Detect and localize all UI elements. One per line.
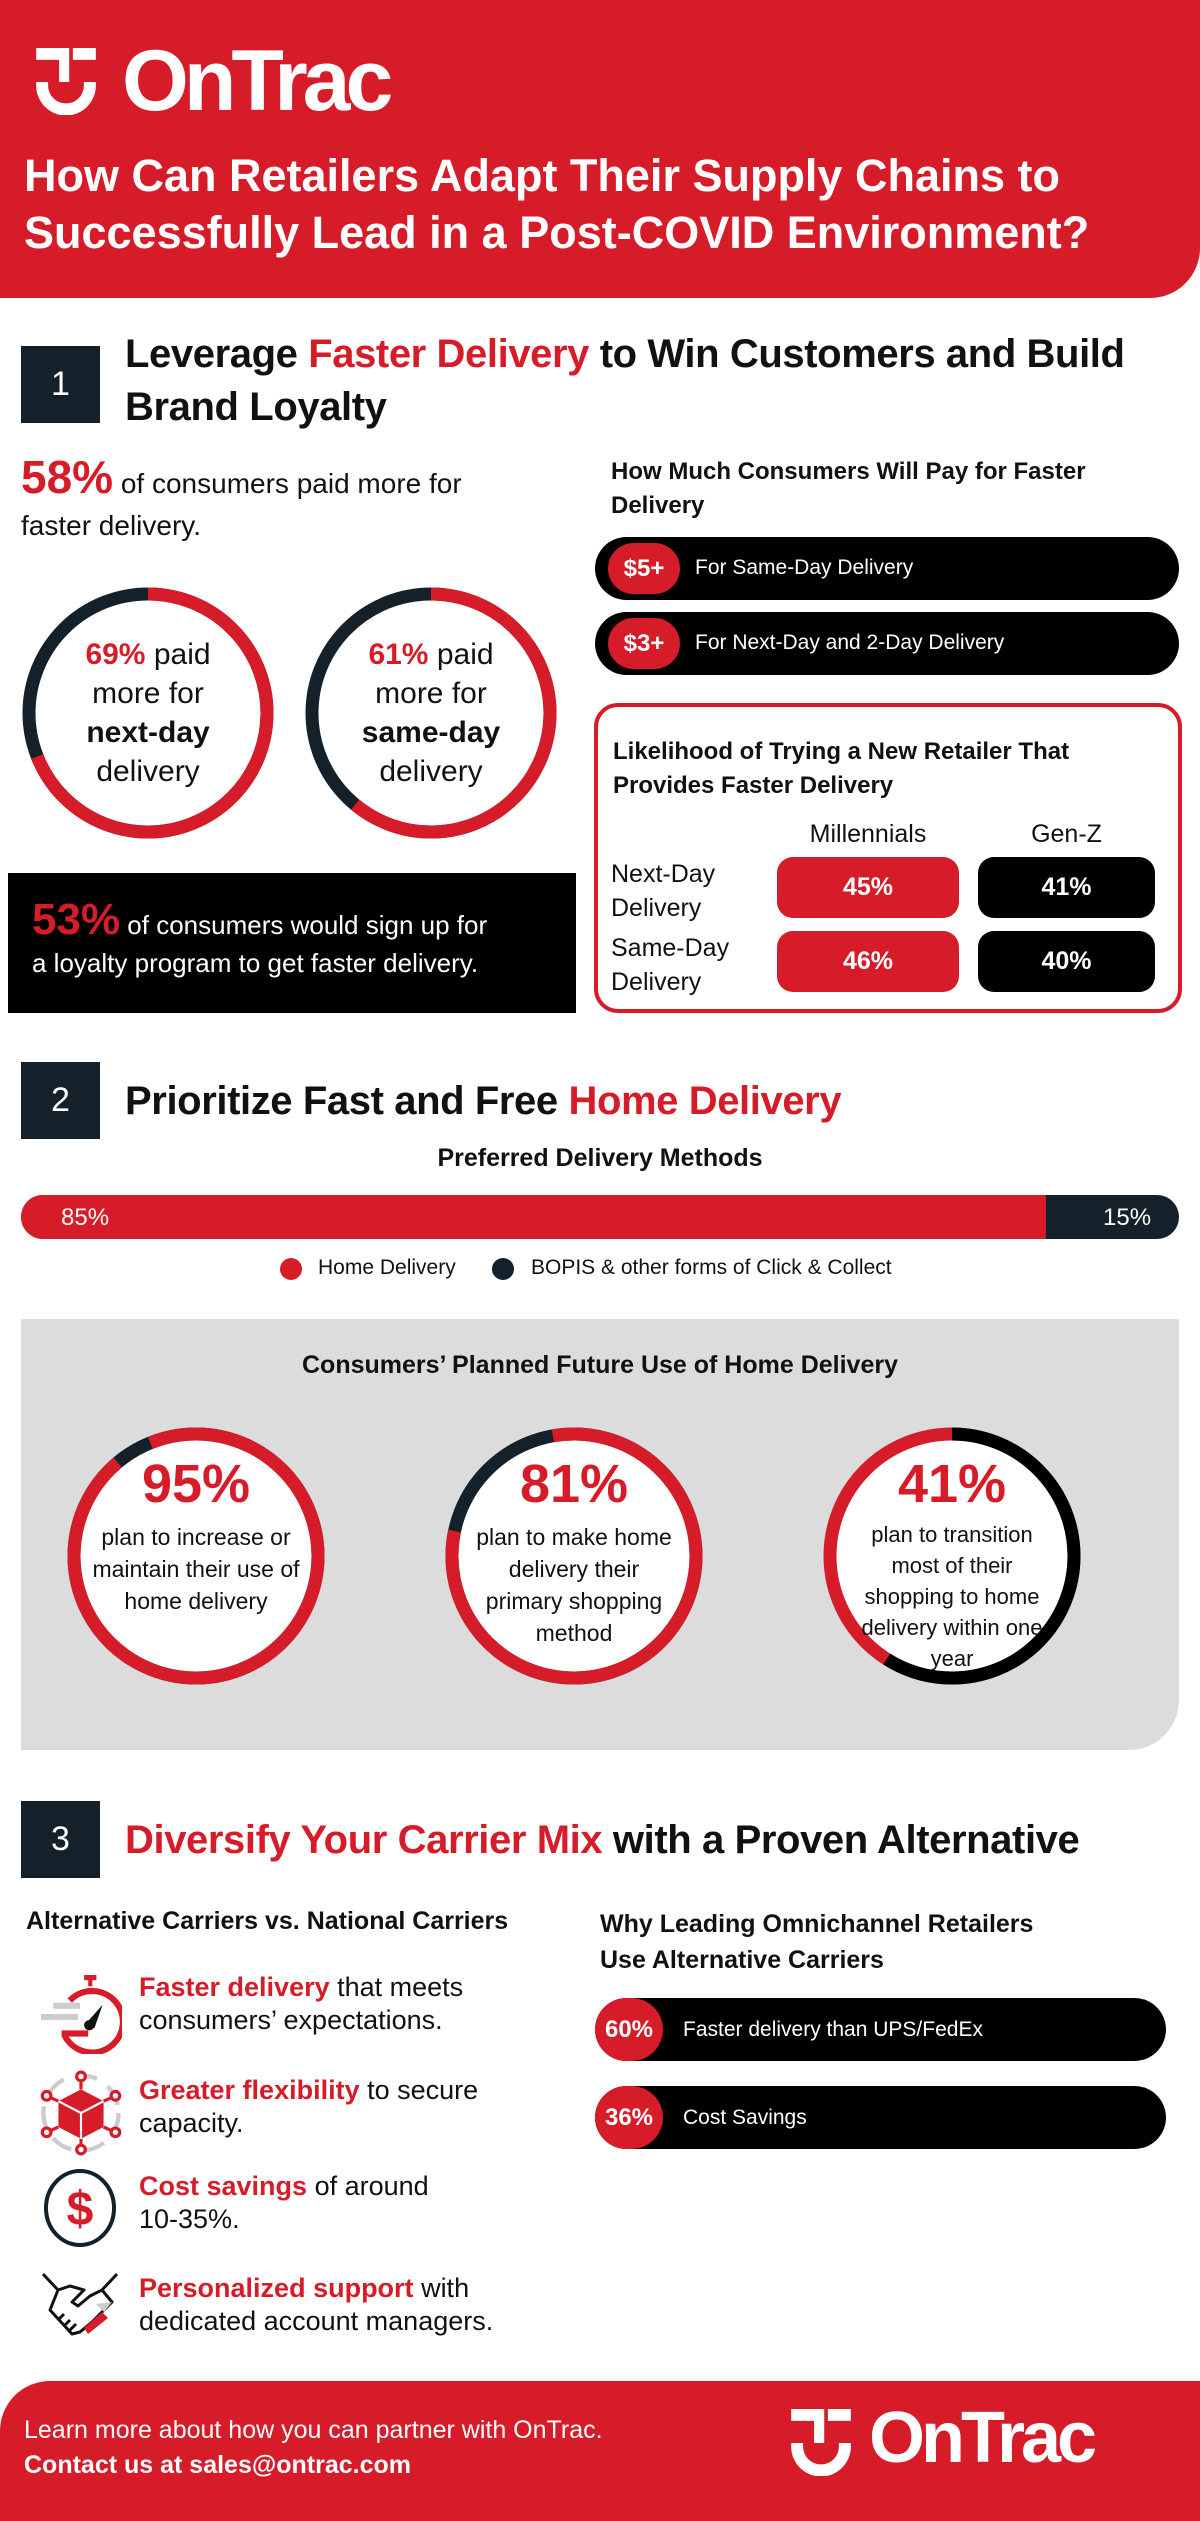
pill $3+ [595, 612, 1179, 675]
preferred delivery bar [21, 1144, 1179, 1280]
ring 41%: plan to transition most of their shopping to home delivery within one year [862, 1522, 1042, 1671]
ring 61%: 61% paid [368, 638, 494, 671]
preferred delivery bar: 85% [61, 1204, 109, 1231]
pay heading: Delivery [611, 492, 704, 519]
item: faster delivery [139, 1972, 463, 2035]
ring 81%: 81% [520, 1454, 628, 1514]
title: How Can Retailers Adapt Their Supply Chains to [24, 150, 1060, 201]
pay heading: How Much Consumers Will Pay for Faster [611, 458, 1086, 485]
stat 58% [21, 451, 462, 541]
item: cost savings: 10-35%. [139, 2204, 240, 2234]
gray panel future use: Consumers’ Planned Future Use of Home Delivery [302, 1351, 898, 1379]
pill 60%: Faster delivery than UPS/FedEx [683, 2018, 983, 2041]
ring 41% [824, 1428, 1080, 1684]
ring 69%: delivery [96, 755, 200, 788]
footer text: Contact us at sales@ontrac.com [24, 2451, 411, 2479]
item: personalized support: Personalized support with [139, 2273, 469, 2303]
likelihood box: 40% [1041, 947, 1092, 975]
likelihood box: Delivery [611, 968, 701, 996]
icon: handshake [42, 2273, 118, 2336]
item: cost savings [139, 2171, 429, 2234]
pill 36%: Cost Savings [683, 2106, 807, 2129]
header banner [0, 0, 1200, 298]
ring 69%: more for [92, 677, 204, 710]
title: Successfully Lead in a Post-COVID Environment? [24, 207, 1089, 258]
why heading [600, 1910, 1033, 1974]
ring 69%: 69% paid [85, 638, 211, 671]
alt carriers subheading: Alternative Carriers vs. National Carriers [26, 1907, 508, 1935]
likelihood box: Delivery [611, 894, 701, 922]
section 3 number: 3 [51, 1820, 70, 1858]
pill 60% [595, 1998, 1166, 2061]
gray panel future use [21, 1319, 1179, 1750]
icon: box network [40, 2070, 122, 2156]
likelihood box: Same-Day [611, 934, 729, 962]
section 3 number [21, 1801, 100, 1878]
item: personalized support [139, 2273, 493, 2336]
why heading: Use Alternative Carriers [600, 1946, 884, 1974]
pill 36% [595, 2086, 1166, 2149]
pay heading [611, 458, 1086, 519]
black box 53%: a loyalty program to get faster delivery. [32, 948, 478, 978]
preferred delivery bar: Preferred Delivery Methods [437, 1144, 763, 1172]
ring 95% [68, 1428, 324, 1684]
section 1 heading [125, 332, 1125, 429]
footer text [24, 2416, 603, 2479]
title [24, 150, 1089, 258]
section 1 number [21, 346, 100, 423]
section 1 heading: Leverage Faster Delivery to Win Customers and Build [125, 332, 1125, 376]
likelihood title [613, 738, 1069, 799]
ring 61%: same-day [362, 716, 500, 749]
logo: OnTrac [122, 33, 388, 129]
pill $5+ [595, 537, 1179, 600]
preferred delivery bar: 15% [1103, 1204, 1151, 1231]
pill $5+: $5+ [624, 554, 664, 582]
icon: dollar [44, 2169, 116, 2247]
footer [0, 2381, 1200, 2521]
pill $3+: For Next-Day and 2-Day Delivery [695, 631, 1004, 654]
item: faster delivery: consumers’ expectations. [139, 2005, 443, 2035]
section 2 number [21, 1062, 100, 1139]
likelihood box: Gen-Z [1031, 820, 1102, 848]
section 3 heading: Diversify Your Carrier Mix with a Proven Alternative [125, 1818, 1079, 1862]
footer text: Learn more about how you can partner with OnTrac. [24, 2416, 603, 2444]
likelihood box [594, 703, 1182, 1013]
likelihood box: 45% [843, 873, 893, 901]
likelihood box: 41% [1041, 873, 1092, 901]
pill $3+: $3+ [624, 630, 664, 656]
item: personalized support: dedicated account managers. [139, 2306, 493, 2336]
likelihood title: Provides Faster Delivery [613, 772, 893, 799]
item: cost savings: Cost savings of around [139, 2171, 429, 2201]
pill 36%: 36% [605, 2104, 653, 2130]
stat 58%: 58% of consumers paid more for [21, 451, 462, 503]
stat 58%: faster delivery. [21, 510, 201, 541]
ring 61% [306, 588, 556, 838]
ring 81%: plan to make home delivery their primary shopping method [476, 1524, 672, 1646]
black box 53%: 53% of consumers would sign up for [32, 895, 487, 944]
likelihood title: Likelihood of Trying a New Retailer That [613, 738, 1069, 765]
pill 60%: 60% [605, 2016, 653, 2042]
preferred delivery bar: BOPIS & other forms of Click & Collect [531, 1256, 892, 1279]
ring 81% [445, 1428, 702, 1684]
section 1 heading: Brand Loyalty [125, 385, 387, 429]
footer logo: OnTrac [869, 2398, 1093, 2478]
item: flexibility: Greater flexibility to secure [139, 2075, 478, 2105]
section 2 heading: Prioritize Fast and Free Home Delivery [125, 1079, 841, 1123]
section 1 number: 1 [51, 365, 70, 403]
section 2 number: 2 [51, 1081, 70, 1119]
ring 69% [22, 588, 274, 838]
black box 53% [8, 873, 576, 1013]
likelihood box: Millennials [810, 820, 926, 848]
icon: stopwatch [41, 1975, 122, 2054]
item: flexibility [139, 2075, 478, 2138]
ring 61%: delivery [379, 755, 483, 788]
likelihood box: Next-Day [611, 860, 715, 888]
item: flexibility: capacity. [139, 2108, 244, 2138]
why heading: Why Leading Omnichannel Retailers [600, 1910, 1033, 1938]
ring 61%: more for [375, 677, 487, 710]
likelihood box: 46% [843, 947, 893, 975]
icon: dollar: $ [67, 2183, 94, 2236]
preferred delivery bar: Home Delivery [318, 1256, 456, 1279]
ring 95%: 95% [142, 1454, 250, 1514]
item: faster delivery: Faster delivery that meets [139, 1972, 463, 2002]
ring 95%: plan to increase or maintain their use of home delivery [92, 1524, 300, 1614]
pill $5+: For Same-Day Delivery [695, 556, 913, 579]
ring 41%: 41% [898, 1454, 1006, 1514]
ring 69%: next-day [86, 716, 210, 749]
